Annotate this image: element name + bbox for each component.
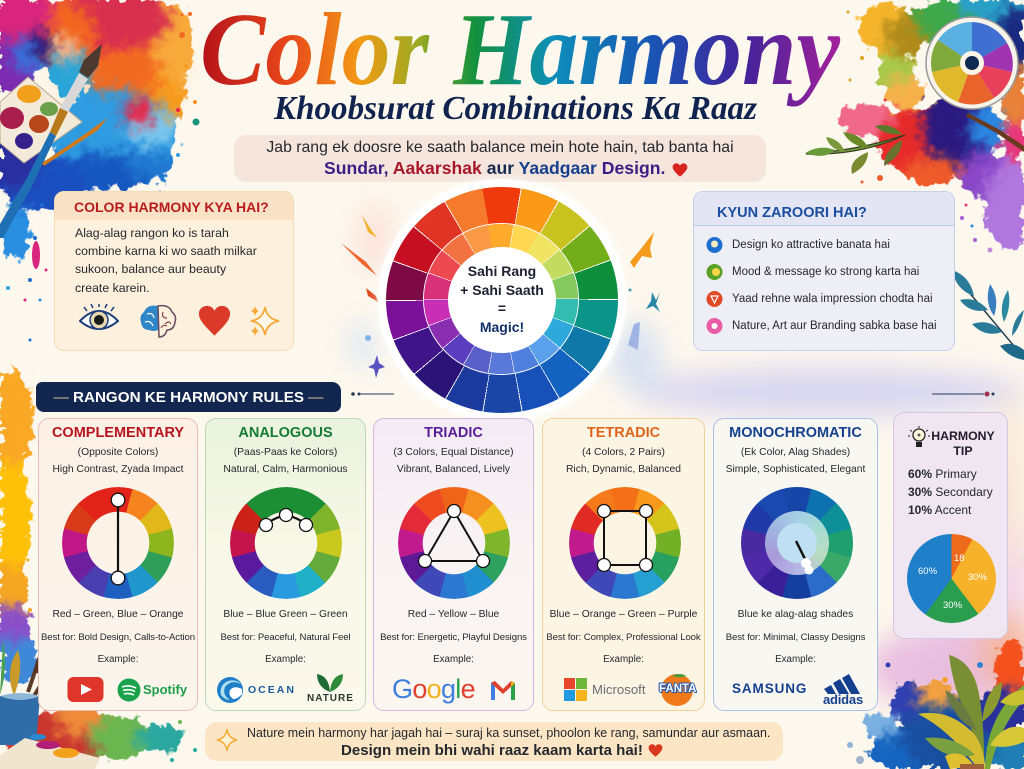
connector <box>418 504 490 568</box>
panel: color harmony kya hai <box>54 191 294 351</box>
card title: ANALOGOUS <box>238 425 333 441</box>
ocean wordmark: OCEAN <box>248 684 296 696</box>
subtitle: Khoobsurat Combinations Ka Raaz <box>273 90 758 127</box>
card subtitle: (Opposite Colors) <box>78 446 158 458</box>
wheel ring <box>568 487 680 599</box>
wheel inner ring <box>424 224 578 374</box>
reason text: Mood & message ko strong karta hai <box>732 266 919 278</box>
panel header band <box>694 192 954 226</box>
logo: gmail <box>491 681 515 700</box>
arrow: right rule <box>932 392 994 396</box>
example label: Example: <box>265 654 306 664</box>
intro line two: Sundar, Aakarshak aur Yaadgaar Design. <box>324 158 665 178</box>
panel: harmony tip <box>893 412 1008 639</box>
logo: spotify <box>118 678 187 702</box>
panel description: create karein. <box>75 281 150 295</box>
pie chart <box>907 534 996 623</box>
color wheel diagram <box>398 487 510 599</box>
icon: leafy plant bottom right <box>918 655 1024 769</box>
card traits: Rich, Dynamic, Balanced <box>566 464 681 474</box>
icon: paint cup and brushes bottom left <box>0 636 100 769</box>
card traits: Simple, Sophisticated, Elegant <box>726 464 865 474</box>
wheel center text: = <box>498 300 506 316</box>
icon: sparkle <box>216 727 238 753</box>
best for: Best for: Complex, Professional Look <box>546 632 701 642</box>
card subtitle: (3 Colors, Equal Distance) <box>393 446 514 458</box>
banner text: — RANGON KE HARMONY RULES — <box>54 389 323 406</box>
logo: samsung: SAMSUNG <box>732 681 807 696</box>
pie label: 30% <box>968 572 987 583</box>
best for: Best for: Minimal, Classy Designs <box>726 632 865 642</box>
icon: sparkles <box>250 306 280 336</box>
logo: google: Google <box>392 674 475 704</box>
arrow: left rule <box>351 392 394 396</box>
wheel ring <box>398 487 510 599</box>
card title: COMPLEMENTARY <box>52 425 184 441</box>
panel: kyun zaroori hai <box>693 191 955 351</box>
card traits: Vibrant, Balanced, Lively <box>397 464 510 474</box>
icon: leaf branch top right <box>805 125 905 174</box>
connector <box>258 508 314 532</box>
icon: bulb badge <box>706 237 722 253</box>
icon: palette top left <box>0 77 82 163</box>
logo: youtube <box>68 677 104 702</box>
nature mark <box>317 674 343 692</box>
icon: brain <box>140 304 176 338</box>
wheel center text: Magic! <box>480 319 524 335</box>
card subtitle: (Paas-Paas ke Colors) <box>234 446 337 458</box>
tip ratios: 10% Accent <box>908 503 971 517</box>
panel description <box>75 226 257 295</box>
panel: triadic <box>373 418 534 711</box>
color pairs: Blue – Blue Green – Green <box>223 608 348 620</box>
reason two <box>706 264 919 280</box>
icon: heart <box>198 306 230 336</box>
microsoft squares <box>564 678 587 701</box>
panel: analogous <box>205 418 366 711</box>
footer callout <box>205 722 783 761</box>
pie label: 18 <box>954 553 965 564</box>
intro banner <box>234 135 766 182</box>
panel heading: COLOR HARMONY KYA HAI? <box>74 199 269 215</box>
color wheel diagram <box>230 487 342 599</box>
icon: mixing wheel top right <box>926 17 1024 152</box>
wheel center text <box>448 247 556 353</box>
icon: impression badge <box>706 291 722 307</box>
logo: ocean <box>217 677 296 703</box>
logo: nature <box>307 674 354 704</box>
panel: tetradic <box>542 418 705 711</box>
wheel outer ring <box>386 187 618 413</box>
nature wordmark: NATURE <box>307 693 354 704</box>
wheel ring <box>62 487 174 599</box>
icon: eye <box>79 304 119 330</box>
color wheel diagram <box>569 487 681 599</box>
reason one <box>706 237 890 253</box>
decorative splashes around the big wheel <box>341 215 660 378</box>
intro line one: Jab rang ek doosre ke saath balance mein hote hain, tab banta hai <box>266 139 734 156</box>
reason three <box>706 291 933 307</box>
icon: heart <box>672 163 688 177</box>
card title: MONOCHROMATIC <box>729 425 862 441</box>
card subtitle: (4 Colors, 2 Pairs) <box>582 446 665 458</box>
example label: Example: <box>775 654 816 664</box>
example label: Example: <box>98 654 138 664</box>
adidas wordmark: adidas <box>823 692 863 707</box>
logo: adidas <box>823 674 863 707</box>
reason text: Nature, Art aur Branding sabka base hai <box>732 320 937 332</box>
central color wheel <box>378 179 626 421</box>
reason four <box>706 318 937 334</box>
panel header band <box>55 192 293 220</box>
best for: Best for: Bold Design, Calls-to-Action <box>41 632 195 642</box>
panel heading: KYUN ZAROORI HAI? <box>717 205 867 221</box>
wheel lighter shades <box>764 511 828 575</box>
panel description: sukoon, balance aur beauty <box>75 262 226 276</box>
tip heading <box>931 429 995 458</box>
color wheel diagram <box>62 487 174 599</box>
panel description: combine karna ki wo saath milkar <box>75 244 257 258</box>
section heading banner <box>36 382 341 412</box>
card title: TETRADIC <box>587 425 660 441</box>
pie label: 60% <box>918 566 937 577</box>
tip ratios: 60% Primary <box>908 467 977 481</box>
fanta circle <box>661 674 693 706</box>
icon: teal leaves right <box>952 270 1024 360</box>
footer line one: Nature mein harmony har jagah hai – suraj ka sunset, phoolon ke rang, samundar aur asmaan. <box>247 726 770 740</box>
spotify wordmark: Spotify <box>143 682 187 697</box>
ocean mark <box>217 677 243 703</box>
microsoft wordmark: Microsoft <box>592 682 646 697</box>
panel: monochromatic <box>713 418 878 711</box>
icon: paint brushes top left <box>0 44 107 238</box>
logo: microsoft <box>564 678 646 701</box>
tip ratios: 30% Secondary <box>908 485 993 499</box>
panel description: Alag-alag rangon ko is tarah <box>75 226 229 240</box>
tip ratios <box>908 465 993 519</box>
tip heading: TIP <box>953 444 973 458</box>
reason text: Design ko attractive banata hai <box>732 239 890 251</box>
spotify mark <box>118 678 140 702</box>
fanta wordmark: FANTA <box>659 683 696 695</box>
best for: Best for: Energetic, Playful Designs <box>380 632 527 642</box>
pie label: 30% <box>943 600 962 611</box>
wheel ring <box>230 487 342 599</box>
example label: Example: <box>433 654 474 664</box>
reason text: Yaad rehne wala impression chodta hai <box>732 293 933 305</box>
wheel disc <box>740 487 852 599</box>
card traits: High Contrast, Zyada Impact <box>52 464 184 474</box>
example label: Example: <box>603 654 644 664</box>
footer line two: Design mein bhi wahi raaz kaam karta hai! <box>341 742 643 759</box>
needle <box>794 540 814 574</box>
color pairs: Red – Green, Blue – Orange <box>52 608 184 620</box>
color pairs: Red – Yellow – Blue <box>408 608 499 620</box>
logo: fanta <box>658 674 698 706</box>
tip heading: HARMONY <box>931 429 995 443</box>
icon: mood badge <box>706 264 722 280</box>
wheel center text: + Sahi Saath <box>460 282 544 298</box>
color pairs: Blue ke alag-alag shades <box>738 608 853 620</box>
wheel center text: Sahi Rang <box>468 263 536 279</box>
adidas stripes <box>822 673 866 695</box>
icon: heart <box>648 743 663 758</box>
color wheel diagram <box>741 487 853 599</box>
connector <box>596 504 654 572</box>
connector <box>110 492 126 586</box>
card title: TRIADIC <box>424 425 483 441</box>
panel: complementary <box>38 418 198 711</box>
card subtitle: (Ek Color, Alag Shades) <box>741 446 850 458</box>
best for: Best for: Peaceful, Natural Feel <box>220 632 351 642</box>
color pairs: Blue – Orange – Green – Purple <box>550 608 697 620</box>
icon: flower badge <box>706 318 722 334</box>
icon: light bulb <box>907 425 931 453</box>
card traits: Natural, Calm, Harmonious <box>223 464 348 474</box>
wheel center <box>776 523 816 563</box>
